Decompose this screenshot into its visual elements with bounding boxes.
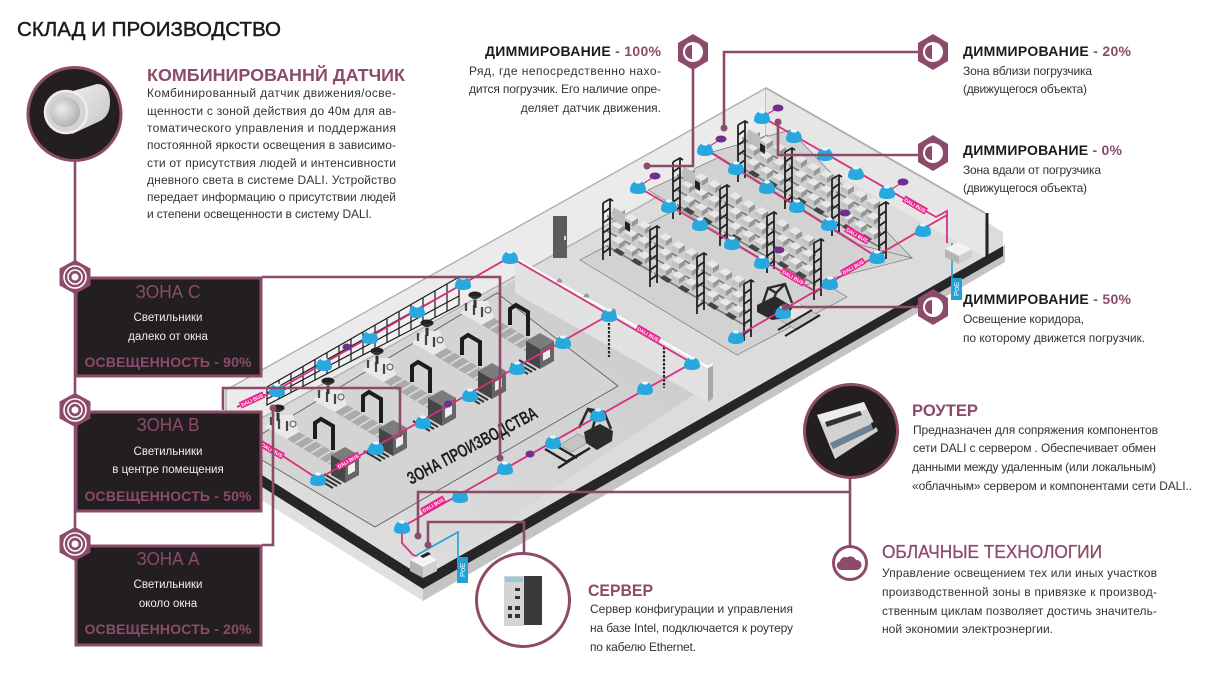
DALI BUS tags: DALI BUS <box>845 227 869 245</box>
DALI bus pink lines <box>237 108 947 558</box>
panel: zone B: ОСВЕЩЕННОСТЬ - 50% <box>84 488 252 504</box>
dimming 0 text: (движущегося объекта) <box>963 181 1087 195</box>
dimming 20 text: (движущегося объекта) <box>963 82 1087 96</box>
icon: dimming 0 hexagon <box>918 135 948 171</box>
DALI BUS tags: DALI BUS <box>842 259 866 276</box>
blue PoE cables <box>417 243 952 560</box>
panel: zone C: ОСВЕЩЕННОСТЬ - 90% <box>84 354 252 370</box>
router text: Предназначен для сопряжения компонентов <box>913 423 1158 437</box>
panel: zone A: ЗОНА А <box>136 549 200 569</box>
sensor description: КОМБИНИРОВАННЙ ДАТЧИК <box>147 64 405 85</box>
warehouse zones <box>580 130 912 355</box>
icon: dimming 50 hexagon <box>918 289 948 325</box>
DALI BUS tags: DALI BUS <box>636 326 660 344</box>
sensor description: щенности с зоной действия до 40м для ав- <box>147 104 396 118</box>
sensor description: сти от присутствия людей и интенсивности <box>147 156 396 170</box>
cloud technologies text: ОБЛАЧНЫЕ ТЕХНОЛОГИИ <box>882 542 1102 562</box>
right wall <box>766 88 988 257</box>
icon: cloud <box>834 546 866 580</box>
router text <box>912 401 1192 493</box>
server text: Сервер конфигурации и управления <box>590 602 793 616</box>
cloud technologies text: производственной зоны в привязке к производ- <box>882 585 1157 599</box>
panel: zone B: в центре помещения <box>112 464 224 476</box>
panel: zone A <box>76 546 261 645</box>
back wall <box>226 88 766 438</box>
production area floor <box>226 280 708 577</box>
dimming 100 text: ДИММИРОВАНИЕ - 100% <box>485 43 662 59</box>
panel: zone B <box>76 412 261 511</box>
warehouse racks <box>603 121 889 341</box>
dimming 100 text: Ряд, где непосредственно нахо- <box>469 64 661 78</box>
icon: combined sensor <box>28 68 121 160</box>
panel: zone A: Светильники <box>134 579 202 591</box>
dimming 50 text: Освещение коридора, <box>963 312 1084 326</box>
cloud technologies text: ной экономии электроэнергии. <box>882 622 1053 636</box>
dimming 20 text: ДИММИРОВАНИЕ - 20% <box>963 43 1132 59</box>
pendant sensors <box>272 292 482 421</box>
router text: РОУТЕР <box>912 401 978 420</box>
icon: zone A hexagon <box>60 527 90 561</box>
sensor description <box>147 64 405 221</box>
door <box>553 216 567 258</box>
callout connector lines <box>75 52 918 553</box>
dimming 50 text: по которому движется погрузчик. <box>963 331 1145 345</box>
panel: zone B: Светильники <box>134 446 202 458</box>
icon: zone C hexagon <box>60 260 90 294</box>
icon: dimming 20 hexagon <box>918 34 948 70</box>
icon: router <box>804 384 898 478</box>
production PoE tag <box>457 557 468 583</box>
production PoE tag: PoE <box>458 563 467 577</box>
dimming 0 text: Зона вдали от погрузчика <box>963 163 1101 177</box>
production forklift <box>545 409 613 468</box>
floor <box>226 88 1003 577</box>
sensor description: дневного света в системе DALI. Устройство <box>147 173 396 187</box>
panel: zone C: далеко от окна <box>128 331 208 343</box>
building base side faces <box>226 245 1005 601</box>
panel: zone C: Светильники <box>134 312 202 324</box>
window grid <box>267 277 459 405</box>
warehouse router box <box>945 242 972 264</box>
production zone <box>240 293 618 527</box>
dimming 100 text: деляет датчик движения. <box>521 101 661 115</box>
dimming 100 text: дится погрузчик. Его наличие опре- <box>469 82 661 96</box>
icon: zone B hexagon <box>60 393 90 427</box>
DALI BUS tags: DALI BUS <box>240 393 265 409</box>
warehouse PoE tag: PoE <box>952 282 961 296</box>
router text: «облачным» сервером и компонентами сети DALI.. <box>912 479 1192 493</box>
DALI BUS tags: DALI BUS <box>422 497 446 514</box>
dimming 20 text <box>963 43 1132 96</box>
panel: zone A: около окна <box>139 598 198 610</box>
title: СКЛАД И ПРОИЗВОДСТВО <box>17 18 281 41</box>
production stations <box>265 301 554 488</box>
cloud technologies text: Управление освещением тех или иных участков <box>882 566 1157 580</box>
sensor description: Комбинированный датчик движения/осве- <box>147 86 396 100</box>
dimming 50 text: ДИММИРОВАНИЕ - 50% <box>963 291 1132 307</box>
panel: zone C <box>76 278 261 376</box>
production router box <box>410 552 437 578</box>
server text: по кабелю Ethernet. <box>590 640 696 654</box>
DALI BUS tags: DALI BUS <box>260 442 284 460</box>
router text: данными между удаленным (или локальным) <box>912 460 1156 474</box>
isometric building plan <box>226 88 1005 601</box>
cloud technologies text <box>882 542 1157 636</box>
DALI BUS tags: DALI BUS <box>903 197 927 215</box>
server text <box>588 581 793 654</box>
sensor description: и степени освещенности в систему DALI. <box>147 207 372 221</box>
sensor description: передает информацию о присутствии людей <box>147 190 396 204</box>
dimming 0 text: ДИММИРОВАНИЕ - 0% <box>963 142 1123 158</box>
icon: server <box>476 554 570 646</box>
panel: zone A: ОСВЕЩЕННОСТЬ - 20% <box>84 621 252 637</box>
warehouse forklift <box>757 284 820 336</box>
lamps <box>269 110 931 534</box>
sensor description: постоянной яркости освещения в зависимо- <box>147 138 396 152</box>
icon: dimming 100 hexagon <box>678 34 708 70</box>
zone label: ЗОНА ПРОИЗВОДСТВА <box>403 403 541 489</box>
cloud technologies text: ственным циклам позволяет достичь значитель- <box>882 604 1157 618</box>
DALI BUS tags: DALI BUS <box>337 453 361 470</box>
partition wall <box>515 258 713 402</box>
DALI BUS tags: DALI BUS <box>781 269 805 287</box>
server text: СЕРВЕР <box>588 581 653 600</box>
panel: zone B: ЗОНА В <box>136 415 200 435</box>
DALI BUS tags <box>239 195 928 515</box>
purple sensors <box>342 104 908 458</box>
router text: сети DALI с сервером . Обеспечивает обмен <box>913 441 1156 455</box>
dimming 20 text: Зона вблизи погрузчика <box>963 64 1092 78</box>
warehouse PoE tag <box>951 278 962 300</box>
sensor description: томатического управления и поддержания <box>147 121 396 135</box>
dimming 0 text <box>963 142 1123 195</box>
dimming 100 text <box>469 43 662 115</box>
server text: на базе Intel, подключается к роутеру <box>590 621 793 635</box>
dimming 50 text <box>963 291 1145 345</box>
panel: zone C: ЗОНА С <box>136 282 200 302</box>
